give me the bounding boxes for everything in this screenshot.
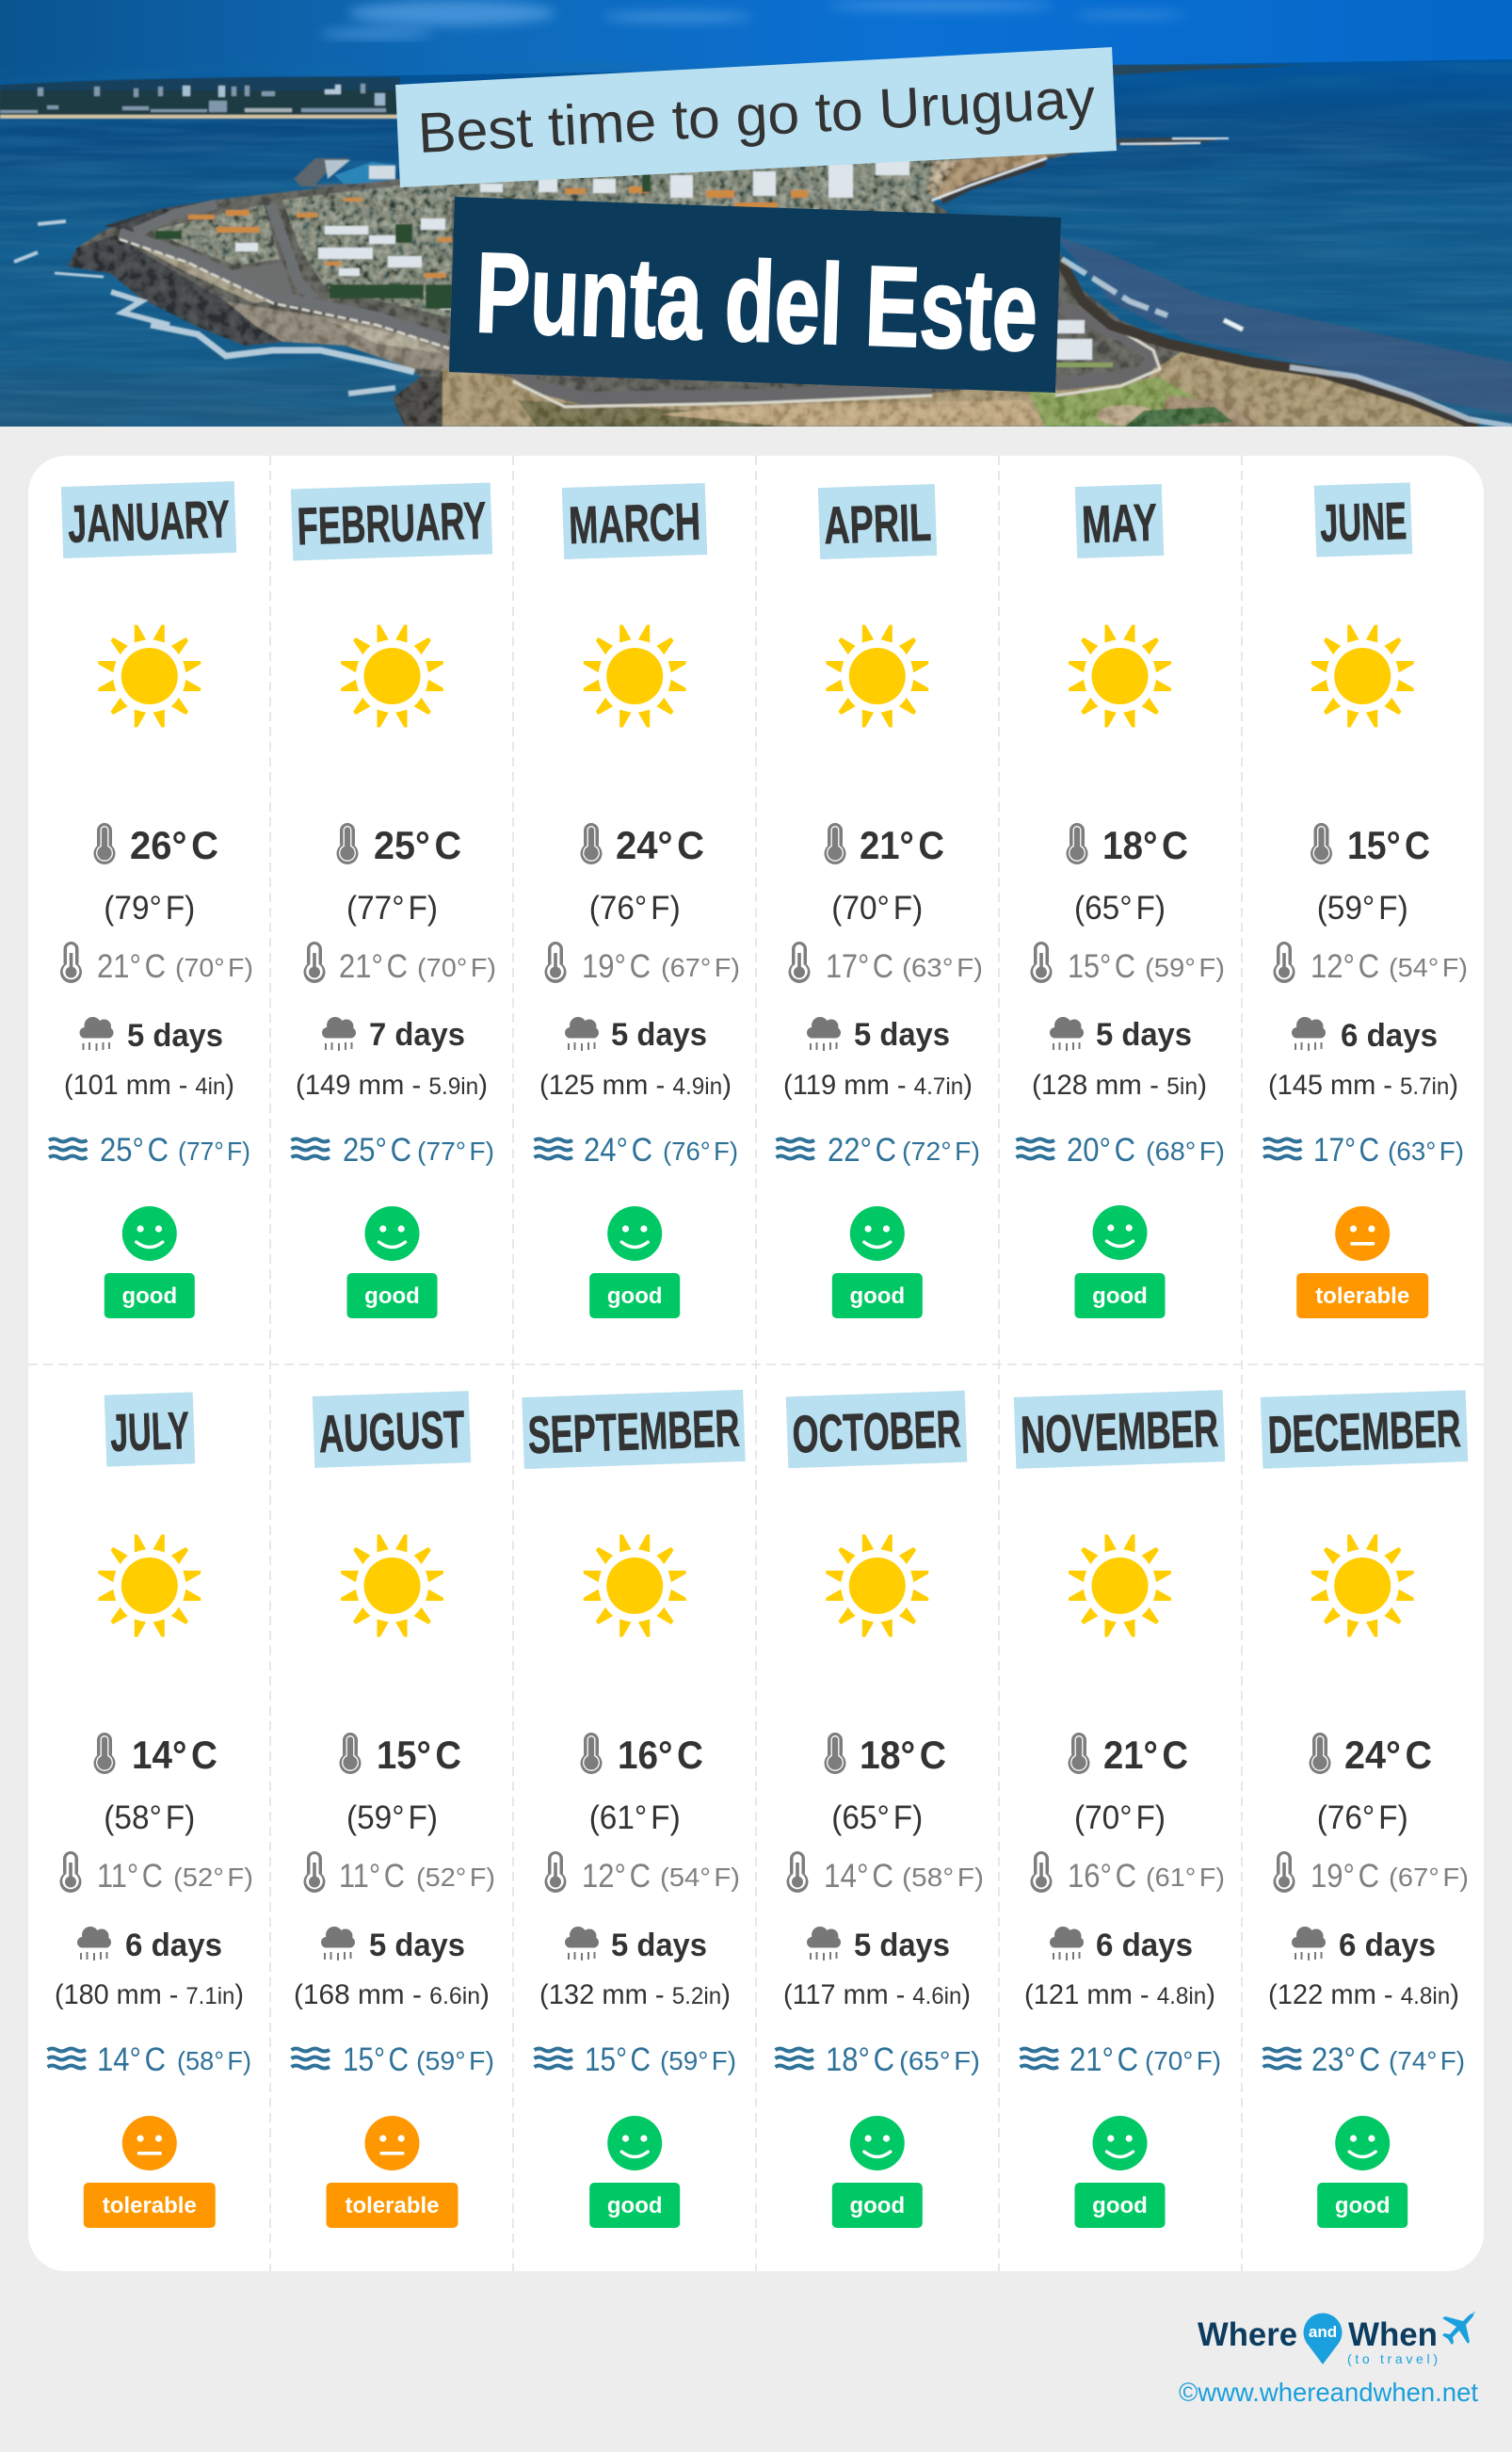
rating badge	[84, 2183, 216, 2228]
icon: sun	[584, 1535, 686, 1637]
rating badge: good	[364, 1283, 420, 1309]
panel: April	[776, 484, 983, 1318]
icon: good face	[122, 1206, 177, 1261]
icon: sun	[1069, 1535, 1171, 1637]
icon: thermometer high	[1068, 1733, 1090, 1774]
rainfall: (145 mm - 5.7in)	[1268, 1070, 1458, 1101]
high temperature fahrenheit: (70° F)	[1074, 1799, 1166, 1836]
rainy days: 5 days	[611, 1928, 707, 1963]
low temperature: (70° F)	[175, 953, 253, 982]
sea temperature: 18° C	[826, 2041, 894, 2078]
sea temperature: 15° C	[343, 2041, 409, 2078]
sea temperature: 25° C	[343, 1132, 411, 1169]
high temperature: 26° C	[130, 823, 218, 867]
high temperature fahrenheit: (76° F)	[1317, 1799, 1408, 1836]
low temperature: (63° F)	[902, 953, 983, 982]
low temperature: 12° C	[582, 1858, 651, 1895]
high temperature: 18° C	[1102, 823, 1188, 867]
icon: sun	[341, 1535, 443, 1637]
month label: June	[1314, 482, 1412, 557]
rainy days: 6 days	[125, 1928, 222, 1963]
icon: rain cloud	[1050, 1017, 1084, 1051]
panel: October	[776, 1391, 984, 2228]
low temperature: 14° C	[824, 1858, 893, 1895]
sea temperature: (63° F)	[1388, 1137, 1464, 1166]
high temperature: 21° C	[1103, 1733, 1188, 1777]
low temperature	[339, 1858, 495, 1895]
low temperature	[1311, 948, 1468, 985]
icon: waves	[1263, 2049, 1301, 2068]
low temperature: 11° C	[339, 1858, 405, 1895]
high temperature: 24° C	[616, 823, 704, 867]
sea temperature: 15° C	[585, 2041, 651, 2078]
icon: rain cloud	[807, 1927, 841, 1960]
rating badge: tolerable	[1315, 1283, 1409, 1309]
rainfall: (168 mm - 6.6in)	[294, 1979, 490, 2010]
rainfall: (122 mm - 4.8in)	[1268, 1979, 1459, 2010]
icon: sun	[1311, 625, 1414, 727]
high temperature fahrenheit: (58° F)	[104, 1799, 195, 1836]
icon: waves	[535, 1139, 572, 1158]
low temperature: 19° C	[1311, 1858, 1379, 1895]
icon: rain cloud	[807, 1017, 841, 1051]
low temperature	[1068, 1858, 1225, 1895]
rating badge	[1075, 1273, 1166, 1318]
high temperature fahrenheit: (59° F)	[1317, 890, 1408, 927]
rating badge	[326, 2183, 458, 2228]
icon: rain cloud	[565, 1927, 599, 1960]
panel: March	[535, 483, 740, 1318]
buildings	[235, 160, 1092, 360]
panel: December	[1261, 1390, 1469, 2228]
sea temperature: 17° C	[1313, 1132, 1379, 1169]
icon: thermometer high	[580, 1733, 603, 1774]
rainy days: 5 days	[611, 1017, 707, 1053]
icon: sun	[584, 625, 686, 727]
rainfall: (128 mm - 5in)	[1032, 1070, 1207, 1101]
rating badge: tolerable	[103, 2193, 197, 2218]
icon: sun	[98, 625, 201, 727]
icon: thermometer low	[1273, 942, 1295, 983]
sea temperature: 22° C	[828, 1132, 896, 1169]
sea temperature: (74° F)	[1389, 2046, 1465, 2075]
subtitle text: Best time to go to Uruguay	[416, 66, 1097, 165]
rating badge: good	[121, 1283, 177, 1309]
rating badge: good	[607, 1283, 663, 1309]
month label: October	[786, 1391, 967, 1468]
sea temperature: (68° F)	[1146, 1137, 1225, 1166]
icon: thermometer low	[60, 1851, 81, 1893]
sea temperature: (70° F)	[1145, 2046, 1221, 2075]
icon: map pin with and	[1304, 2314, 1343, 2364]
icon: thermometer high	[825, 823, 845, 864]
land texture	[68, 153, 1457, 427]
sea temperature	[828, 1132, 980, 1169]
low temperature: 15° C	[1068, 948, 1135, 985]
sea temperature	[97, 2041, 251, 2078]
icon: tolerable face	[365, 2116, 420, 2170]
sea temperature: 20° C	[1067, 1132, 1135, 1169]
high temperature: 14° C	[132, 1733, 217, 1777]
low temperature	[1068, 948, 1225, 985]
sea temperature: (59° F)	[660, 2046, 736, 2075]
icon: good face	[1335, 2116, 1390, 2170]
icon: thermometer low	[1030, 942, 1053, 983]
icon: thermometer high	[337, 823, 358, 864]
rating badge: good	[1335, 2193, 1391, 2218]
panel: September	[522, 1390, 746, 2228]
sea temperature: (59° F)	[416, 2046, 494, 2075]
panel: June	[1263, 482, 1468, 1318]
main white panel	[28, 456, 1484, 2271]
sea temperature	[343, 1132, 494, 1169]
sea temperature	[1311, 2041, 1465, 2078]
title banner	[449, 197, 1061, 393]
month label: August	[313, 1391, 471, 1468]
rainfall: (132 mm - 5.2in)	[539, 1979, 731, 2010]
icon: waves	[1021, 2049, 1058, 2068]
low temperature	[339, 948, 496, 985]
rating badge	[832, 2183, 923, 2228]
header photo: aerial view of Punta del Este	[0, 0, 1512, 427]
high temperature fahrenheit: (77° F)	[346, 890, 438, 927]
icon: thermometer high	[825, 1733, 845, 1774]
month label: January	[61, 481, 236, 558]
high temperature fahrenheit: (59° F)	[346, 1799, 438, 1836]
rating badge	[832, 1273, 923, 1318]
low temperature	[97, 1858, 253, 1895]
month label: May	[1075, 484, 1164, 558]
sea temperature: (76° F)	[663, 1137, 738, 1166]
icon: good face	[1092, 2116, 1147, 2170]
icon: waves	[1017, 1139, 1054, 1158]
low temperature: (54° F)	[1389, 953, 1468, 982]
month label: April: APRIL	[823, 492, 932, 555]
icon: thermometer high	[1066, 823, 1088, 864]
icon: sun	[98, 1535, 201, 1637]
rainy days: 7 days	[369, 1017, 465, 1053]
logo word: When: When	[1348, 2316, 1438, 2353]
low temperature	[582, 1858, 740, 1895]
month label: November	[1014, 1390, 1225, 1469]
icon: good face	[607, 2116, 662, 2170]
month label: March: MARCH	[568, 492, 701, 555]
high temperature fahrenheit: (70° F)	[831, 890, 923, 927]
low temperature: 21° C	[339, 948, 408, 985]
sea temperature: 24° C	[584, 1132, 652, 1169]
low temperature: (52° F)	[416, 1863, 495, 1892]
icon: thermometer low	[1030, 1851, 1053, 1893]
month label: November: NOVEMBER	[1020, 1398, 1219, 1464]
icon: thermometer low	[544, 1851, 567, 1893]
icon: thermometer low	[789, 942, 810, 983]
icon: map pin with and: and	[1309, 2323, 1337, 2341]
icon: sun	[826, 625, 928, 727]
month label: August: AUGUST	[318, 1399, 466, 1463]
low temperature: 12° C	[1311, 948, 1379, 985]
high temperature fahrenheit: (65° F)	[1074, 890, 1166, 927]
month label: June: JUNE	[1319, 491, 1407, 553]
rainy days: 6 days	[1096, 1928, 1193, 1963]
icon: thermometer low	[60, 942, 82, 983]
month label: February: FEBRUARY	[297, 491, 488, 556]
sea temperature: (77° F)	[178, 1137, 250, 1166]
rating badge	[1296, 1273, 1428, 1318]
icon: sun	[1311, 1535, 1414, 1637]
sea temperature	[826, 2041, 980, 2078]
rating badge: tolerable	[345, 2193, 439, 2218]
high temperature fahrenheit: (61° F)	[589, 1799, 681, 1836]
high temperature: 25° C	[374, 823, 461, 867]
footer website: ©www.whereandwhen.net	[1179, 2378, 1478, 2407]
low temperature: (52° F)	[173, 1863, 253, 1892]
icon: thermometer low	[1273, 1851, 1295, 1893]
icon: thermometer low	[303, 1851, 326, 1893]
icon: good face	[607, 1206, 662, 1261]
icon: rain cloud	[79, 1017, 113, 1051]
rainy days: 5 days	[854, 1017, 950, 1053]
month label: July: JULY	[109, 1400, 190, 1462]
icon: thermometer low	[544, 942, 567, 983]
icon: rain cloud	[322, 1017, 356, 1051]
rating badge: good	[1092, 2193, 1148, 2218]
icon: rain cloud	[1292, 1017, 1326, 1051]
rating badge	[589, 2183, 680, 2228]
sea temperature: 23° C	[1311, 2041, 1380, 2078]
month label: April	[818, 484, 937, 559]
month label: July	[105, 1392, 195, 1467]
low temperature: (61° F)	[1146, 1863, 1225, 1892]
sea temperature: 21° C	[1070, 2041, 1138, 2078]
icon: thermometer high	[1309, 1733, 1331, 1774]
icon: rain cloud	[1050, 1927, 1084, 1960]
low temperature: 11° C	[97, 1858, 163, 1895]
low temperature: 19° C	[582, 948, 651, 985]
sea temperature	[584, 1132, 738, 1169]
low temperature	[582, 948, 740, 985]
rainy days: 6 days	[1339, 1928, 1436, 1963]
low temperature	[826, 948, 983, 985]
sea temperature	[1313, 1132, 1464, 1169]
icon: waves	[49, 1139, 87, 1158]
low temperature: (67° F)	[1389, 1863, 1469, 1892]
title text: Punta del Este	[474, 228, 1039, 375]
icon: thermometer high	[1311, 823, 1332, 864]
high temperature: 15° C	[377, 1733, 461, 1777]
icon: airplane	[1442, 2312, 1476, 2345]
footer logo: Where and When (to travel)	[1198, 2312, 1476, 2366]
panel: May	[1017, 484, 1225, 1318]
icon: waves	[1263, 1139, 1301, 1158]
sea temperature	[1067, 1132, 1225, 1169]
rating badge	[589, 1273, 680, 1318]
month label: February	[291, 483, 492, 560]
low temperature: (58° F)	[902, 1863, 984, 1892]
icon: tolerable face	[1335, 1206, 1390, 1261]
icon: waves	[535, 2049, 572, 2068]
lower land	[442, 348, 1478, 427]
rating badge: good	[607, 2193, 663, 2218]
icon: rain cloud	[565, 1017, 599, 1051]
icon: rain cloud	[321, 1927, 355, 1960]
low temperature	[97, 948, 253, 985]
month label: September: SEPTEMBER	[527, 1398, 741, 1464]
rainfall: (101 mm - 4in)	[64, 1070, 234, 1101]
sea temperature: (65° F)	[899, 2046, 980, 2075]
rainy days: 5 days	[127, 1018, 223, 1054]
icon: thermometer high	[339, 1733, 362, 1774]
month label: March	[562, 483, 707, 559]
low temperature: (59° F)	[1145, 953, 1225, 982]
icon: thermometer low	[787, 1851, 808, 1893]
town base	[151, 155, 960, 318]
sea temperature: (77° F)	[417, 1137, 494, 1166]
rainfall: (119 mm - 4.7in)	[783, 1070, 973, 1101]
sea temperature	[585, 2041, 736, 2078]
marina	[294, 158, 353, 188]
month label: September	[522, 1390, 746, 1469]
panel: August	[292, 1391, 495, 2228]
icon: waves	[292, 2049, 330, 2068]
icon: sun	[341, 625, 443, 727]
rating badge	[105, 1273, 195, 1318]
low temperature: (67° F)	[661, 953, 740, 982]
sea temperature: (72° F)	[902, 1137, 980, 1166]
panel: January	[49, 481, 253, 1318]
icon: thermometer high	[94, 1733, 115, 1774]
low temperature: 21° C	[97, 948, 166, 985]
high temperature fahrenheit: (65° F)	[831, 1799, 923, 1836]
roads	[120, 234, 449, 341]
sea temperature: 25° C	[100, 1132, 169, 1169]
rainfall: (149 mm - 5.9in)	[296, 1070, 488, 1101]
low temperature: (70° F)	[417, 953, 496, 982]
high temperature: 15° C	[1347, 823, 1430, 867]
low temperature: 16° C	[1068, 1858, 1136, 1895]
icon: good face	[1092, 1205, 1147, 1260]
month label: January: JANUARY	[67, 489, 231, 554]
rating badge	[346, 1273, 437, 1318]
icon: waves	[776, 2049, 813, 2068]
tan shore	[226, 301, 449, 372]
rating badge	[1317, 2183, 1407, 2228]
icon: rain cloud	[77, 1927, 111, 1960]
rainfall: (121 mm - 4.8in)	[1024, 1979, 1215, 2010]
rainy days: 5 days	[369, 1928, 465, 1963]
high temperature: 16° C	[618, 1733, 703, 1777]
icon: rain cloud	[1292, 1927, 1326, 1960]
rating badge	[1075, 2183, 1166, 2228]
icon: good face	[850, 1206, 905, 1261]
high temperature fahrenheit: (76° F)	[589, 890, 681, 927]
sea temperature	[1070, 2041, 1221, 2078]
rocks and surf	[941, 162, 1045, 201]
rating badge: good	[849, 1283, 905, 1309]
low temperature	[824, 1858, 984, 1895]
panel: July	[47, 1392, 253, 2228]
rocks dark	[68, 235, 282, 346]
sea temperature	[343, 2041, 494, 2078]
icon: thermometer high	[94, 823, 115, 864]
icon: good face	[850, 2116, 905, 2170]
high temperature: 24° C	[1344, 1733, 1432, 1777]
icon: thermometer high	[580, 823, 603, 864]
icon: waves	[292, 1139, 330, 1158]
rating badge: good	[1092, 1283, 1148, 1309]
rainy days: 5 days	[854, 1928, 950, 1963]
rainy days: 5 days	[1096, 1017, 1192, 1053]
icon: tolerable face	[122, 2116, 177, 2170]
rainfall: (117 mm - 4.6in)	[783, 1979, 971, 2010]
month label: May: MAY	[1081, 492, 1158, 554]
rainfall: (125 mm - 4.9in)	[539, 1070, 732, 1101]
logo word: Where: Where	[1198, 2316, 1297, 2353]
low temperature: (54° F)	[660, 1863, 740, 1892]
panel: February	[291, 483, 496, 1318]
sea temperature: (58° F)	[177, 2046, 251, 2075]
subtitle banner	[395, 47, 1117, 187]
icon: waves	[776, 1139, 814, 1158]
rainy days: 6 days	[1341, 1018, 1438, 1054]
icon: sun	[826, 1535, 928, 1637]
peninsula base land	[68, 146, 1478, 427]
icon: good face	[365, 1206, 420, 1261]
high temperature fahrenheit: (79° F)	[104, 890, 195, 927]
high temperature: 18° C	[860, 1733, 946, 1777]
rating badge: good	[849, 2193, 905, 2218]
high temperature: 21° C	[860, 823, 944, 867]
low temperature: 17° C	[826, 948, 893, 985]
icon: waves	[47, 2049, 86, 2068]
icon: sun	[1069, 625, 1171, 727]
icon: thermometer low	[303, 942, 326, 983]
sea temperature	[100, 1132, 250, 1169]
logo tagline: (to travel)	[1347, 2351, 1438, 2366]
low temperature	[1311, 1858, 1469, 1895]
sea temperature: 14° C	[97, 2041, 166, 2078]
month label: October: OCTOBER	[792, 1398, 962, 1464]
rainfall: (180 mm - 7.1in)	[55, 1979, 244, 2010]
panel: November	[1014, 1390, 1225, 2228]
